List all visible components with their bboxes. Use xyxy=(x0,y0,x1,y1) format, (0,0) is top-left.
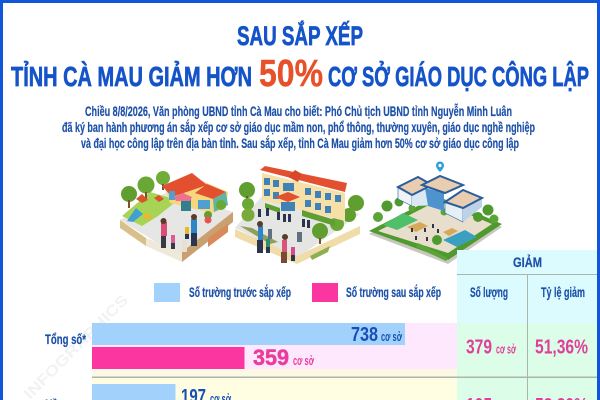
bar: after 359 xyxy=(92,345,314,370)
bar: before 197 xyxy=(92,384,231,400)
panel: reduction column xyxy=(457,250,597,400)
row: total xyxy=(45,323,588,370)
legend: Số trường sau sắp xếp xyxy=(346,285,441,300)
row: total: Tổng số* xyxy=(45,331,86,347)
column header: GIẢM: GIẢM xyxy=(513,255,542,270)
intro text xyxy=(62,104,535,151)
row background: total xyxy=(92,323,457,377)
bar: before 738: 738 xyxy=(351,324,378,346)
bar: before 738: cơ sở xyxy=(381,330,402,344)
legend: Số trường trước sắp xếp xyxy=(189,285,291,300)
illustration: primary school xyxy=(235,166,364,264)
table lines xyxy=(92,274,597,400)
value: reduction 379: 379 xyxy=(466,336,492,358)
title xyxy=(11,20,589,95)
bar: after 359: 359 xyxy=(253,345,289,370)
row strip under total xyxy=(92,369,457,377)
bar: before 738 xyxy=(92,323,405,346)
bar: after 359: cơ sở xyxy=(293,354,314,368)
illustration: kindergarten xyxy=(120,171,233,262)
row background: second row xyxy=(92,378,457,400)
title: TỈNH CÀ MAU GIẢM HƠN xyxy=(11,60,252,92)
title: 50% xyxy=(259,53,323,95)
row: second category xyxy=(45,384,588,400)
value: reduction 379: cơ sở xyxy=(496,342,516,356)
value: reduction 379 xyxy=(466,336,516,358)
legend xyxy=(154,283,441,302)
title: SAU SẮP XẾP xyxy=(237,20,363,51)
column header: Số lượng: Số lượng xyxy=(470,285,508,300)
illustration: campus with location pin xyxy=(369,162,502,264)
